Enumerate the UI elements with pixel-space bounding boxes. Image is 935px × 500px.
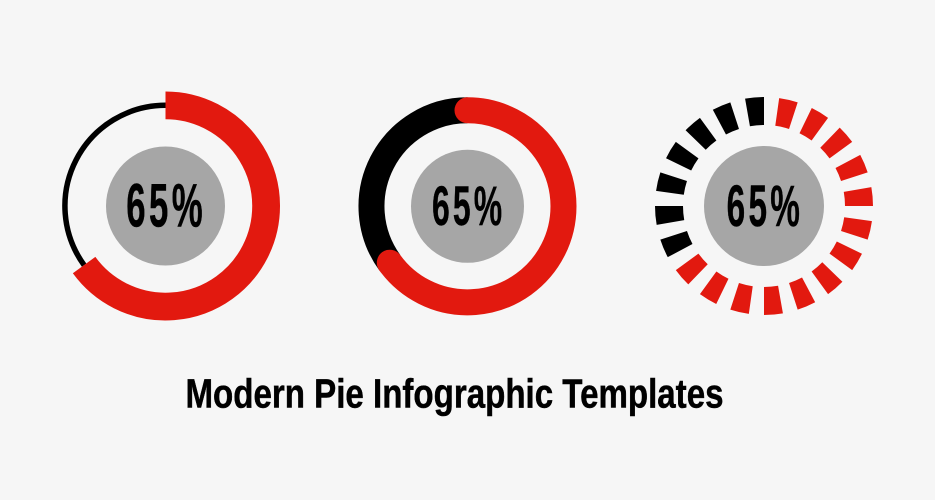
grey centre disc [704, 146, 824, 266]
value label: 65% [432, 175, 505, 237]
red ticks, 13 of 20 [676, 98, 873, 315]
value label: 65% [727, 174, 803, 240]
grey centre disc [106, 146, 225, 266]
title: Modern Pie Infographic Templates [186, 370, 724, 416]
chart 1: thin track with thick red arc [65, 105, 266, 307]
thick red 65% arc [84, 105, 266, 307]
black ticks, 7 of 20 [655, 97, 766, 257]
rounded red 65% arc [390, 110, 563, 302]
grey centre disc [411, 150, 524, 263]
thin black track [65, 105, 166, 265]
value label: 65% [126, 171, 206, 240]
chart 2: thick ring with rounded red arc [371, 110, 563, 302]
chart 3: segmented ring of 20 ticks [655, 97, 873, 315]
black ring segment [371, 110, 468, 263]
